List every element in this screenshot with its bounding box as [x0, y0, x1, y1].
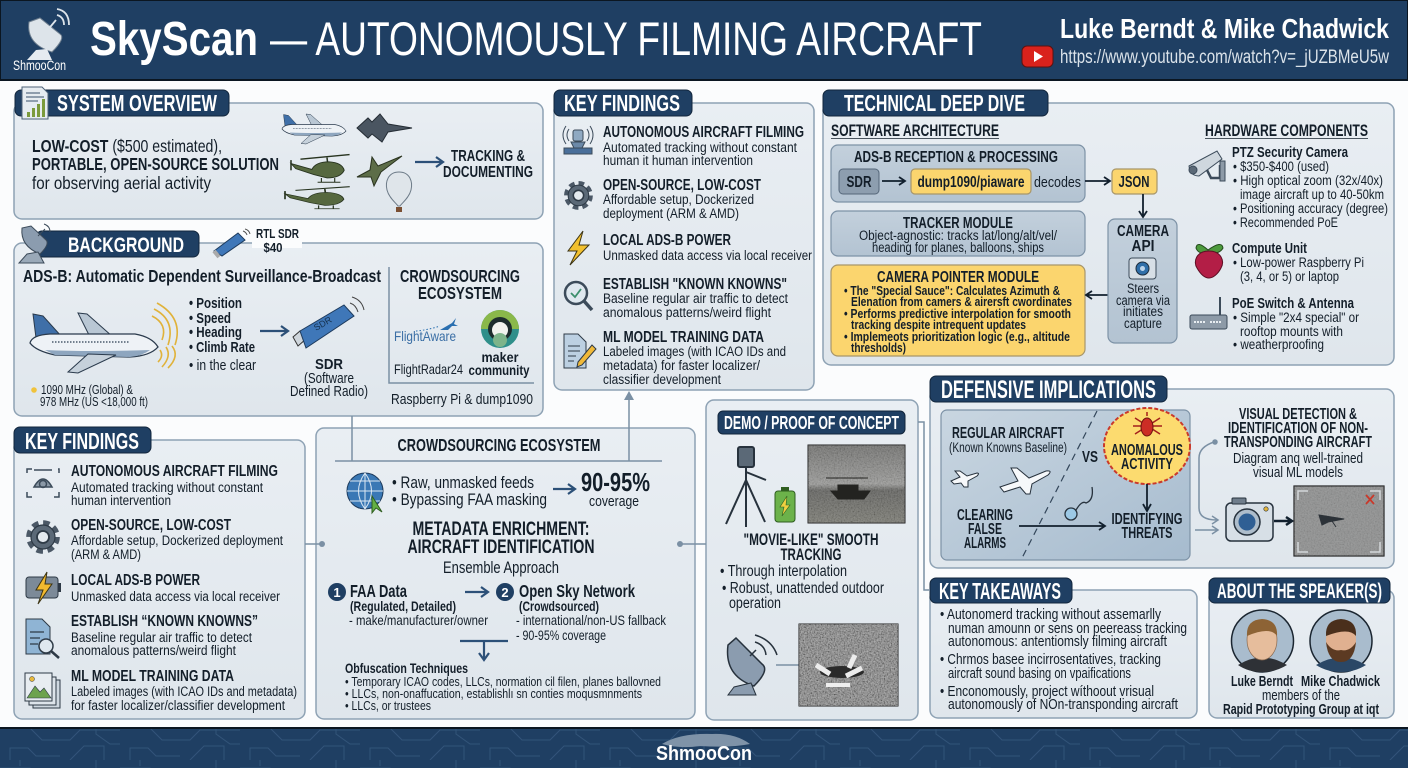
arrow — [415, 157, 443, 167]
hardware: poe switch: PoE Switch & Antenna — [1232, 296, 1355, 312]
ads-b heading: ADS-B: Automatic Dependent Surveillance-Broadcast — [23, 266, 381, 286]
finding: open source: OPEN-SOURCE, LOW-COST — [71, 517, 231, 534]
heading: background: BACKGROUND — [68, 234, 184, 257]
frequency note: 1090 MHz (Global) & — [41, 383, 134, 397]
icon: sdr dongle — [293, 297, 364, 348]
finding: known knowns: anomalous patterns/weird flight — [71, 643, 236, 658]
tracker module: TRACKER MODULE — [903, 215, 1013, 232]
footer logo — [656, 734, 752, 765]
feed bullets: • Bypassing FAA masking — [392, 490, 547, 509]
panel: technical deep dive — [823, 90, 1394, 365]
regular aircraft label: REGULAR AIRCRAFT — [952, 425, 1064, 442]
step 1: faa data: (Regulated, Detailed) — [350, 598, 456, 614]
icon: gear — [567, 184, 590, 207]
arrow — [1019, 522, 1105, 530]
hardware: ptz camera — [1189, 145, 1388, 230]
hardware: ptz camera: • Recommended PoE — [1233, 215, 1338, 230]
ads-b fields: • Speed — [189, 310, 231, 327]
icon: router antenna — [1190, 297, 1227, 329]
camera pointer module: thresholds) — [851, 340, 906, 355]
icon: balloon — [386, 172, 412, 212]
metadata heading: AIRCRAFT IDENTIFICATION — [408, 537, 594, 558]
takeaway bullets: autonomous: antentiomsly filming aircraft — [948, 634, 1167, 650]
arrow — [1139, 194, 1147, 217]
clearing false alarms: CLEARING — [957, 507, 1013, 524]
ads-b fields: • Heading — [189, 324, 242, 341]
icon: radio waves — [152, 303, 177, 368]
finding: autonomous filming: Automated tracking without constant — [603, 140, 797, 155]
icon: dish — [728, 635, 777, 695]
heading: system overview: SYSTEM OVERVIEW — [57, 90, 217, 116]
heading: key findings: KEY FINDINGS — [25, 428, 139, 454]
finding: autonomous filming: AUTONOMOUS AIRCRAFT FILMING — [603, 124, 804, 141]
arrow — [1274, 517, 1292, 525]
hardware: compute unit: (3, 4, or 5) or laptop — [1240, 269, 1339, 284]
finding: local ads-b: Unmasked data access via local receiver — [603, 248, 812, 263]
clearing false alarms — [957, 507, 1013, 552]
finding: ml data — [564, 329, 786, 387]
icon: lightning — [568, 231, 589, 265]
finding: open source: Affordable setup, Dockerized deployment — [71, 533, 283, 548]
coverage stat: 90-95% — [581, 467, 650, 497]
ads-b fields: • Position — [189, 295, 242, 312]
finding: open source — [567, 177, 761, 221]
icon: usb dongle — [214, 229, 250, 257]
speaker caption: Mike Chadwick — [1301, 674, 1381, 690]
sdr node — [839, 169, 879, 194]
icon: gear — [30, 524, 56, 550]
overview statement: LOW-COST ($500 estimated), — [32, 136, 222, 156]
heading: system overview — [15, 90, 229, 116]
sdr label: SDR — [315, 356, 343, 373]
icon: airliner — [30, 313, 158, 373]
software architecture title: SOFTWARE ARCHITECTURE — [831, 122, 999, 140]
icon: tripod camera — [726, 447, 766, 527]
sdr node: SDR — [846, 174, 872, 191]
camera pointer module: • The "Special Sauce": Calculates Azimuth & — [844, 283, 1060, 298]
crowdsourcing sidebar: Raspberry Pi & dump1090 — [391, 392, 533, 408]
visual detection text: visual ML models — [1253, 464, 1343, 481]
movie-like tracking — [720, 531, 884, 612]
json node — [1112, 169, 1157, 194]
camera pointer module: • Performs predictive interpolation for smooth — [844, 306, 1071, 321]
metadata heading: METADATA ENRICHMENT: — [412, 519, 590, 540]
takeaway bullets: autonomously of NOn-transponding aircraft — [948, 697, 1178, 713]
finding: ml data: Labeled images (with ICAO IDs and — [603, 344, 786, 359]
finding: ml data: Labeled images (with ICAO IDs and metadata) — [71, 684, 297, 699]
icon: satellite dish logo — [27, 9, 69, 60]
flightaware logo — [394, 318, 458, 344]
hardware: compute unit: • Low-power Raspberry Pi — [1233, 255, 1364, 270]
tracking label: DOCUMENTING — [443, 164, 533, 181]
ads-b fields: • Climb Rate — [189, 339, 255, 356]
step 2: open sky network: Open Sky Network — [519, 581, 635, 601]
heading: background — [36, 231, 199, 257]
panel: demo proof of concept — [706, 400, 918, 720]
arrow — [882, 177, 905, 185]
takeaway bullets: • Chrmos basee incirrosentatives, tracking — [940, 652, 1161, 668]
panel: about the speakers — [1209, 578, 1394, 718]
panel: background — [14, 224, 543, 416]
step 2: open sky network: - international/non-US fallback — [516, 612, 667, 628]
frequency note — [31, 383, 148, 409]
rtl sdr price — [252, 226, 302, 255]
hardware: poe switch: rooftop mounts with — [1240, 324, 1343, 339]
obfuscation techniques — [345, 660, 661, 713]
icon: camera — [1226, 498, 1273, 541]
decodes label: decodes — [1034, 174, 1081, 191]
hardware: ptz camera: image aircraft up to 40-50km — [1240, 187, 1384, 202]
camera api: initiates — [1123, 304, 1163, 319]
icon: battery bolt — [26, 572, 61, 604]
connector lines — [305, 391, 930, 590]
visual detection text: VISUAL DETECTION & — [1239, 406, 1357, 423]
hardware: compute unit — [1195, 241, 1364, 284]
tracking label: TRACKING & — [451, 148, 525, 165]
finding: autonomous filming — [563, 124, 804, 168]
step 1: faa data: 1 — [333, 585, 341, 600]
obfuscation techniques: • Temporary ICAO codes, LLCs, normation cil filen, planes ballovned — [345, 674, 661, 689]
title: SkyScan — [90, 13, 258, 66]
finding: ml data: ML MODEL TRAINING DATA — [603, 329, 764, 346]
anomalous activity callout: ACTIVITY — [1121, 456, 1173, 473]
icon: tracking frame — [27, 469, 59, 497]
finding: known knowns: anomalous patterns/weird flight — [603, 305, 771, 320]
icon: small planes — [951, 468, 1050, 494]
header banner — [0, 0, 1408, 80]
finding: local ads-b — [568, 231, 812, 265]
comparison diagram — [941, 408, 1190, 560]
portrait: mike — [1310, 610, 1372, 672]
detection image — [1294, 486, 1384, 556]
identifying threats — [1112, 511, 1182, 542]
logo text: ShmooCon — [13, 57, 66, 73]
sdr label — [290, 356, 368, 400]
finding: known knowns: Baseline regular air traffic to detect — [603, 291, 788, 306]
identifying threats: THREATS — [1122, 525, 1173, 542]
icon: report chart — [22, 87, 48, 119]
crowdsourcing sidebar: CROWDSOURCING — [400, 266, 520, 286]
arrow — [465, 587, 488, 597]
footer banner — [0, 728, 1408, 768]
finding: autonomous filming: human it human intervention — [603, 153, 753, 168]
obfuscation techniques: Obfuscation Techniques — [345, 660, 468, 676]
icon: image stack — [25, 673, 60, 708]
panel: key findings center — [554, 90, 814, 390]
arrow — [260, 326, 288, 336]
identifying threats: IDENTIFYING — [1112, 511, 1182, 528]
camera pointer module — [831, 265, 1085, 356]
arrow — [1143, 484, 1151, 511]
movie-like tracking: • Through interpolation — [720, 563, 847, 580]
step 2: open sky network: (Crowdsourced) — [519, 598, 599, 614]
finding: ml data: classifier development — [603, 372, 721, 387]
tracker module: Object-agnostic: tracks lat/long/alt/vel/ — [859, 228, 1057, 243]
camera api — [1108, 219, 1177, 343]
camera api: capture — [1124, 316, 1162, 331]
anomalous activity callout — [1104, 408, 1190, 484]
movie-like tracking: TRACKING — [780, 546, 842, 564]
heading: key findings: KEY FINDINGS — [564, 90, 680, 116]
clearing false alarms: FALSE — [968, 521, 1002, 538]
icon: camera — [1129, 258, 1156, 279]
sdr label: (Software — [304, 371, 354, 387]
obfuscation techniques: • LLCs, non-onaffucation, establishlı sn conties moqusmnments — [345, 686, 642, 701]
obfuscation techniques: • LLCs, or trustees — [345, 698, 431, 713]
finding: ml data: for faster localizer/classifier development — [71, 698, 285, 713]
camera pointer module: Elenation from camers & airersft cwordinates — [851, 294, 1072, 309]
step 1: faa data — [328, 581, 488, 628]
finding: ml data: metadata) for faster localizer/ — [603, 358, 760, 373]
finding: known knowns — [26, 613, 258, 658]
vs label: VS — [1082, 449, 1098, 466]
rtl sdr price: RTL SDR — [256, 226, 299, 241]
panel: crowdsourcing ecosystem — [316, 428, 695, 719]
finding: local ads-b — [26, 572, 280, 604]
finding: autonomous filming: AUTONOMOUS AIRCRAFT FILMING — [71, 463, 278, 480]
icon: sdr dongle: SDR — [312, 314, 334, 333]
metadata heading — [408, 519, 594, 577]
camera api: API — [1132, 238, 1154, 255]
heading — [930, 376, 1167, 404]
camera api: Steers — [1127, 281, 1159, 296]
ads-b reception box: ADS-B RECEPTION & PROCESSING — [854, 149, 1058, 166]
hardware: poe switch: • weatherproofing — [1233, 337, 1324, 352]
anomalous activity callout: ANOMALOUS — [1111, 442, 1183, 459]
coverage stat — [581, 467, 650, 510]
arrow — [553, 484, 575, 494]
panel: key findings left — [14, 427, 305, 719]
dump1090 node — [911, 169, 1031, 194]
icon: document search — [26, 619, 59, 658]
icon: youtube — [1022, 46, 1053, 67]
json node: JSON — [1118, 174, 1150, 191]
overview statement: PORTABLE, OPEN-SOURCE SOLUTION — [32, 154, 279, 174]
tracker module: heading for planes, balloons, ships — [872, 240, 1044, 255]
icon: bug — [1133, 412, 1162, 436]
step 2: open sky network: 2 — [501, 585, 509, 600]
takeaway bullets: • Enconomously, project wíthoout vrisual — [940, 684, 1154, 700]
clearing false alarms: ALARMS — [964, 535, 1006, 552]
finding: local ads-b: Unmasked data access via local receiver — [71, 589, 280, 604]
icon: globe cursor — [347, 473, 383, 513]
feed bullets — [392, 473, 547, 509]
visual detection text — [1224, 406, 1372, 481]
ads-b reception box — [831, 145, 1085, 202]
step 2: open sky network — [496, 581, 667, 643]
finding: open source: deployment (ARM & AMD) — [603, 206, 739, 221]
camera api: CAMERA — [1117, 223, 1169, 240]
takeaway bullets: • Autonomerd tracking without assemarlly — [940, 607, 1162, 623]
finding: open source — [30, 517, 283, 562]
hardware: poe switch: • Simple "2x4 special" or — [1233, 310, 1359, 325]
title — [90, 12, 982, 66]
ads-b fields: • in the clear — [189, 357, 256, 374]
finding: known knowns: Baseline regular air traffic to detect — [71, 630, 252, 645]
icon: battery — [775, 487, 795, 522]
title: — AUTONOMOUSLY FILMING AIRCRAFT — [270, 12, 982, 65]
takeaway bullets: numan amounn or sens on peereass tracking — [948, 621, 1187, 637]
step 2: open sky network: - 90-95% coverage — [516, 627, 606, 643]
demo photo: vehicle — [808, 445, 905, 523]
icon: maker community logo — [481, 310, 519, 348]
step 1: faa data: FAA Data — [350, 581, 407, 601]
movie-like tracking: operation — [729, 595, 781, 612]
portrait: luke — [1232, 610, 1294, 672]
hardware: ptz camera: • $350-$400 (used) — [1233, 159, 1329, 174]
rtl sdr price: $40 — [264, 240, 282, 255]
icon: balloon squiggle — [1065, 487, 1092, 520]
frequency note: 978 MHz (US <18,000 ft) — [40, 395, 148, 409]
icon: document pencil — [564, 334, 596, 368]
finding: known knowns: ESTABLISH "KNOWN KNOWNS" — [603, 276, 787, 293]
finding: local ads-b: LOCAL ADS-B POWER — [71, 572, 200, 589]
finding: open source: OPEN-SOURCE, LOW-COST — [603, 177, 761, 194]
arrows to camera — [1195, 440, 1218, 534]
arrow — [1086, 291, 1108, 299]
icon: security camera — [1189, 151, 1225, 181]
arrow down — [460, 641, 508, 660]
icon: radar operator — [563, 126, 593, 154]
hardware: compute unit: Compute Unit — [1232, 241, 1307, 257]
crowdsourcing sidebar: ECOSYSTEM — [418, 283, 502, 303]
step 1: faa data: - make/manufacturer/owner — [349, 612, 488, 628]
crowdsourcing sidebar: maker — [482, 349, 519, 365]
icon: magnifier check — [565, 282, 592, 310]
icon: dish — [19, 224, 50, 263]
regular aircraft label: (Known Knowns Baseline) — [949, 440, 1067, 455]
hardware: ptz camera: • High optical zoom (32x/40x) — [1233, 173, 1383, 188]
heading: DEFENSIVE IMPLICATIONS — [941, 376, 1156, 404]
panel: key takeaways — [930, 578, 1197, 718]
speaker caption — [1223, 674, 1381, 718]
finding: ml data: ML MODEL TRAINING DATA — [71, 668, 234, 685]
hardware: ptz camera: PTZ Security Camera — [1232, 145, 1349, 161]
takeaway bullets — [940, 607, 1187, 713]
coverage stat: coverage — [589, 493, 639, 510]
metadata heading: Ensemble Approach — [443, 558, 559, 577]
heading: KEY TAKEAWAYS — [939, 578, 1061, 604]
panel: system overview — [14, 87, 543, 219]
heading — [930, 578, 1072, 604]
crowdsourcing sidebar: community — [468, 362, 530, 378]
footer logo: ShmooCon — [656, 743, 752, 765]
panel: defensive implications — [930, 376, 1394, 568]
finding: autonomous filming: Automated tracking without constant — [71, 480, 263, 495]
finding: ml data — [25, 668, 297, 713]
finding: known knowns: ESTABLISH “KNOWN KNOWNS” — [71, 613, 258, 630]
arrow — [1085, 177, 1110, 185]
camera pointer module: CAMERA POINTER MODULE — [877, 269, 1039, 286]
movie-like tracking: • Robust, unattended outdoor — [722, 580, 884, 597]
aircraft icons — [282, 114, 412, 212]
finding: open source: Affordable setup, Dockerized — [603, 192, 754, 207]
icon: raspberry — [1195, 244, 1223, 278]
finding: autonomous filming: human intervention — [71, 493, 171, 508]
heading: DEMO / PROOF OF CONCEPT — [724, 413, 899, 433]
finding: local ads-b: LOCAL ADS-B POWER — [603, 232, 731, 249]
speaker caption: Luke Berndt — [1231, 674, 1293, 690]
flightaware logo: FlightAware — [394, 328, 456, 344]
dump1090 node: dump1090/piaware — [918, 174, 1025, 191]
crowdsourcing sidebar — [389, 266, 534, 408]
heading — [718, 411, 905, 434]
takeaway bullets: aircraft sound basing on vpaifications — [948, 666, 1131, 682]
movie-like tracking: "MOVIE-LIKE" SMOOTH — [744, 531, 878, 549]
visual detection text: Diagram anq well-trained — [1233, 450, 1363, 467]
finding: known knowns — [565, 276, 788, 320]
finding: open source: (ARM & AMD) — [71, 547, 141, 562]
tracking label — [443, 148, 533, 181]
icon: red x — [1366, 495, 1374, 504]
overview statement — [32, 136, 279, 193]
tracker module — [831, 211, 1085, 256]
demo photo: aircraft on runway — [799, 624, 898, 706]
feed bullets: • Raw, unmasked feeds — [392, 473, 534, 492]
hardware: poe switch — [1190, 296, 1359, 352]
finding: autonomous filming — [27, 463, 278, 508]
camera pointer module: tracking despite intrequent updates — [851, 317, 1026, 332]
camera pointer module: • Implemeots prioritization logic (e.g., altitude — [844, 329, 1070, 344]
regular aircraft label — [949, 425, 1067, 455]
camera api: camera via — [1116, 293, 1170, 308]
heading: TECHNICAL DEEP DIVE — [844, 90, 1025, 116]
heading: CROWDSOURCING ECOSYSTEM — [398, 435, 600, 455]
speaker caption: members of the — [1262, 688, 1340, 704]
ads-b fields — [189, 295, 256, 374]
overview statement: for observing aerial activity — [32, 173, 211, 193]
sdr label: Defined Radio) — [290, 384, 368, 400]
crowdsourcing sidebar: FlightRadar24 — [394, 361, 463, 377]
